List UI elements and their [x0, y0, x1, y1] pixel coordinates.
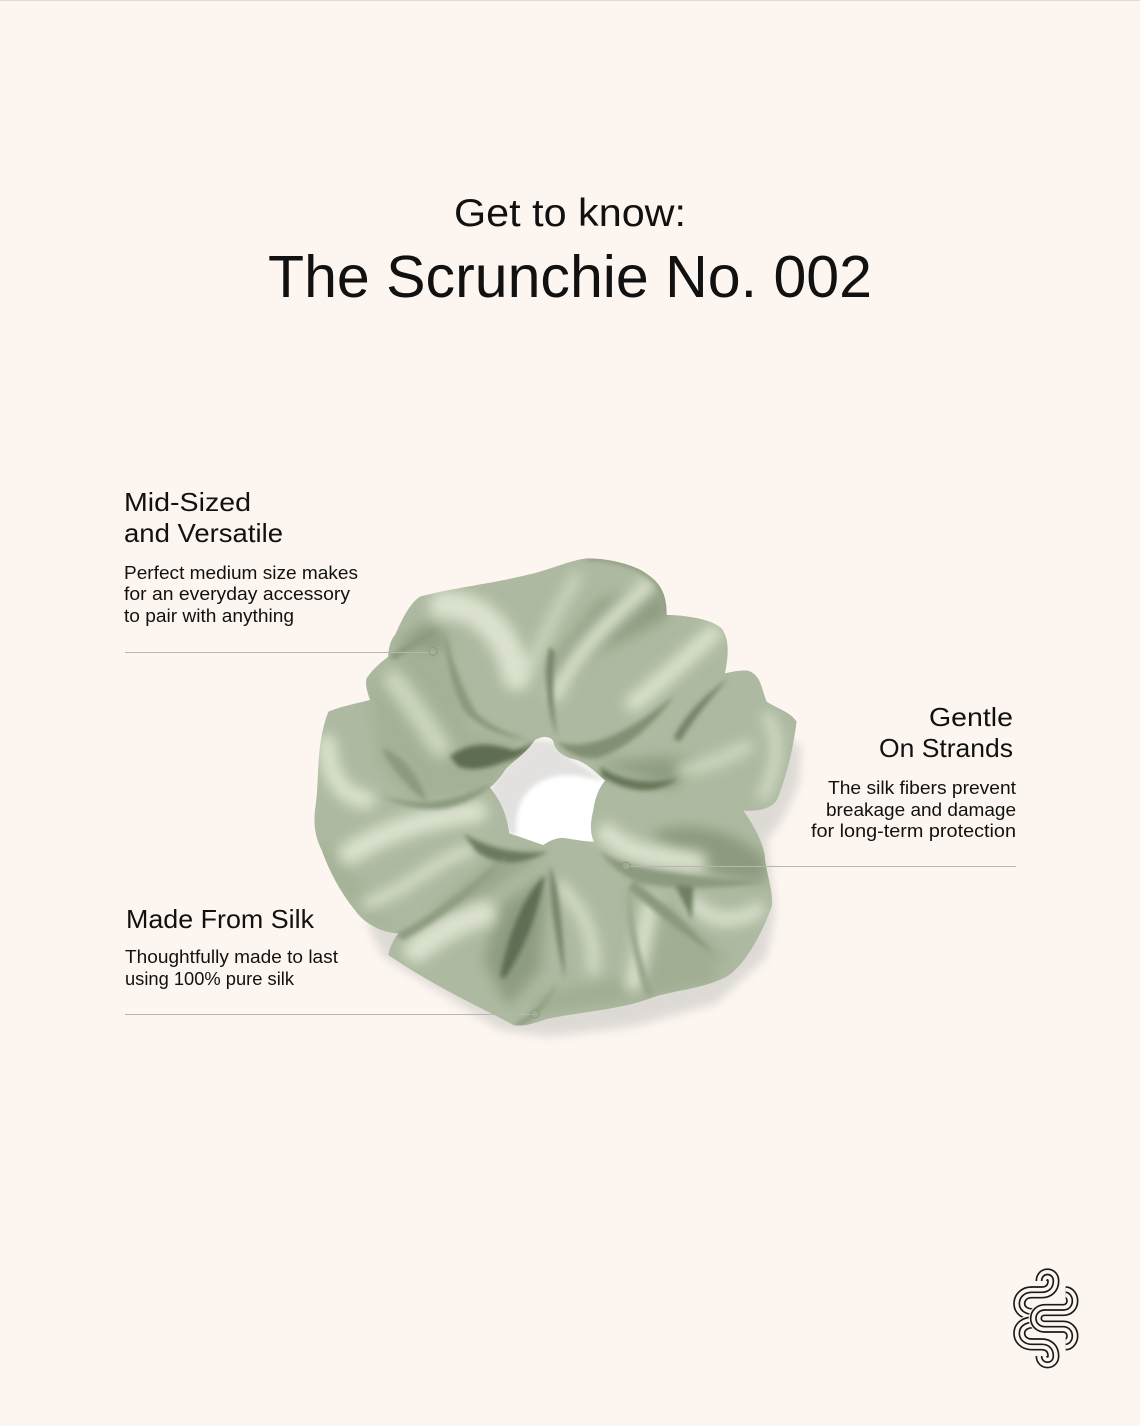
broad dark fold areas: [313, 583, 767, 1013]
callout: mid-sized and versatile: [124, 487, 437, 656]
callout: mid-sized and versatile: to pair with anything: [124, 606, 294, 626]
hole shadow: [490, 740, 605, 835]
title: The Scrunchie No. 002: [268, 244, 872, 310]
soft drop shadow: [367, 727, 802, 1037]
callout: gentle on strands: for long-term protection: [811, 821, 1016, 841]
callout: mid-sized and versatile: Mid-Sized: [124, 487, 251, 517]
callout: made from silk: Thoughtfully made to last: [125, 947, 338, 967]
callout: gentle on strands: Gentle: [929, 702, 1013, 732]
hole white: [490, 740, 605, 845]
silk body: [314, 558, 796, 1026]
callout: gentle on strands: On Strands: [879, 733, 1013, 763]
rim shading: [587, 558, 667, 615]
title: [268, 192, 872, 310]
callout: mid-sized and versatile: for an everyday accessory: [124, 584, 350, 604]
title: Get to know:: [454, 192, 686, 235]
icon: brand logo: [1019, 1274, 1072, 1362]
bright sheen: [327, 577, 776, 983]
callout: gentle on strands: The silk fibers prevent: [828, 778, 1016, 798]
callout: made from silk: using 100% pure silk: [125, 969, 295, 989]
callout: made from silk: [125, 904, 539, 1018]
callout: made from silk: Made From Silk: [126, 904, 315, 934]
callout: gentle on strands: breakage and damage: [826, 800, 1016, 820]
callout: mid-sized and versatile: and Versatile: [124, 518, 283, 548]
callout: mid-sized and versatile: Perfect medium size makes: [124, 563, 358, 583]
callout: gentle on strands: [622, 702, 1016, 870]
scrunchie illustration: [314, 558, 804, 1040]
tapered creases: [380, 627, 765, 1027]
